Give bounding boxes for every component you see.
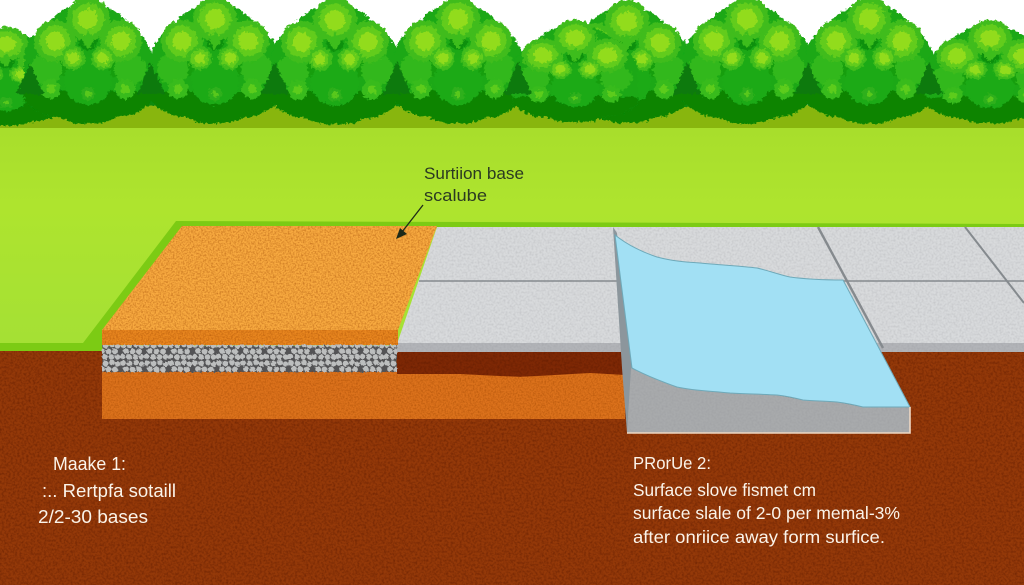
right note: after onriice away form surfice. xyxy=(633,527,885,547)
block base edge xyxy=(627,407,910,433)
cut-away channel xyxy=(613,227,910,433)
slab front edge xyxy=(397,343,1024,352)
left note xyxy=(38,454,176,527)
aggregate block xyxy=(627,368,910,433)
water surface xyxy=(615,235,910,407)
callout label: scalube xyxy=(424,187,487,205)
lawn xyxy=(0,128,1024,352)
lower orange sub-base layer xyxy=(102,372,625,419)
paving slabs xyxy=(397,227,1024,352)
left note: Maake 1: xyxy=(53,454,126,474)
callout label xyxy=(396,165,524,239)
dark soil band under slab xyxy=(397,352,625,376)
channel left wall xyxy=(613,227,632,433)
hedge row of bushes xyxy=(0,0,1024,125)
left note: 2/2-30 bases xyxy=(38,507,148,527)
sky background xyxy=(0,0,1024,130)
right note: Surface slove fismet cm xyxy=(633,480,816,500)
right note: PRorUe 2: xyxy=(633,453,711,473)
right note xyxy=(633,453,900,547)
soil ground xyxy=(0,351,1024,585)
callout text: Surtiion base xyxy=(424,165,524,183)
slab surface xyxy=(397,227,1024,344)
lawn edge strip xyxy=(0,221,1024,352)
left note: :.. Rertpfa sotaill xyxy=(42,481,176,501)
hedge backing strip xyxy=(0,105,1024,129)
right note: surface slale of 2-0 per memal-3% xyxy=(633,503,900,523)
slab joints xyxy=(419,227,1024,348)
gravel layer xyxy=(102,345,397,372)
orange top surface xyxy=(102,226,437,330)
orange front face xyxy=(102,330,398,345)
callout arrow xyxy=(396,205,423,239)
